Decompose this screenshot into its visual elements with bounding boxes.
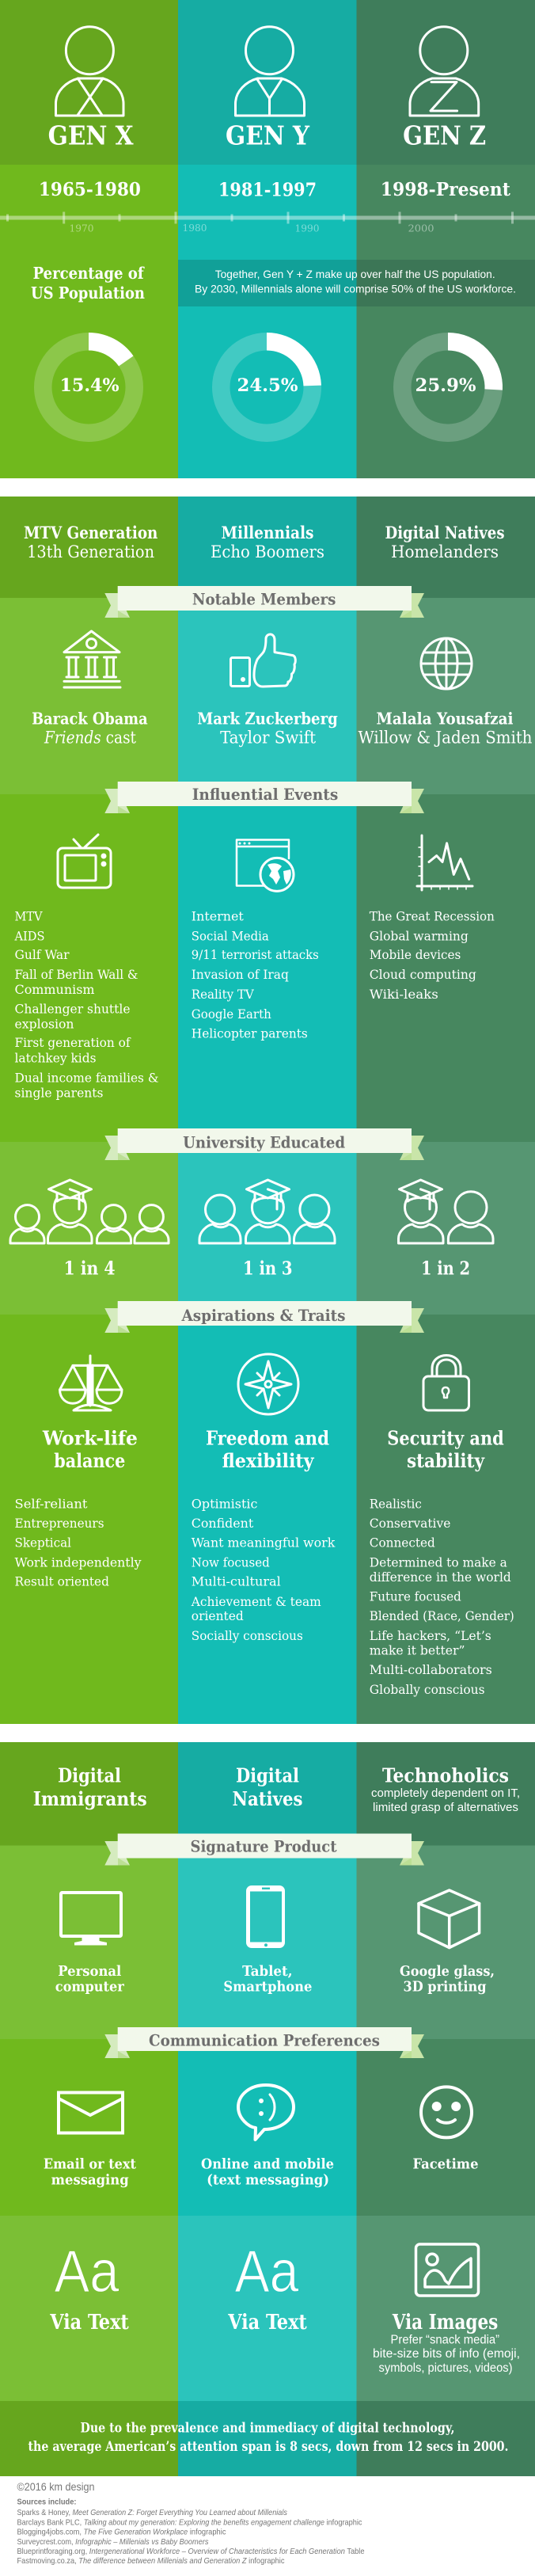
list: Gen Y influential events: Reality TV [192,987,255,1002]
icon: smiley face [421,2087,472,2137]
text: Google glass, 3D printing [400,1963,495,1996]
text: Facetime: Facetime [413,2156,478,2172]
icon: 1 in 3 graduates [199,1180,335,1243]
panel: generations overview [0,0,535,478]
list: Gen X influential events: Challenger shuttle [14,1003,130,1017]
icon: 3D cube [419,1890,480,1948]
list: Gen Y influential events: 9/11 terrorist attacks [192,948,319,962]
list: Gen Z traits: Future focused [370,1590,461,1604]
icon: globe [421,638,472,689]
text: Gen Y members [197,710,338,748]
text: Gen X members: Barack Obama [32,710,148,729]
callout: attention span [28,2421,508,2455]
list: Gen X influential events: single parents [14,1086,103,1101]
text: tablet, smartphone [223,1963,312,1996]
text: Gen Z aspiration: Security and [387,1426,504,1449]
text: Via Images, Gen Z: Via Images [392,2311,498,2334]
text: Technoholics: completely dependent on IT, [371,1786,520,1800]
list: Gen Y traits: Achievement & team [191,1595,321,1609]
heading: Gen Z: GEN Z [403,120,486,151]
icon: 1 in 4 graduates [10,1180,169,1243]
text: sources list: Blogging4jobs.com, The Five Generation Workplace infographic [17,2527,226,2536]
list: Gen Y influential events [192,909,319,1041]
text: Online and mobile: Online and mobile [201,2156,334,2172]
text: sources list: Barclays Bank PLC, Talking about my generation: Exploring the benefits engagement challenge infographic [17,2517,362,2527]
list: Gen Z influential events: Cloud computing [370,968,476,982]
text: percentage of US population [31,264,145,302]
list: Gen Y influential events: Helicopter parents [192,1026,308,1041]
text: sources list: Fastmoving.co.za, The difference between Millenials and Generation Z infographic [17,2556,285,2566]
list: Gen X traits: Skeptical [14,1536,72,1551]
text: Digital Natives: Natives [233,1787,302,1810]
list: Gen Z traits [370,1497,514,1697]
text: Gen Y aspiration [206,1426,329,1472]
icon: speech bubble smile [238,2085,294,2140]
icon: declining line chart [417,835,472,890]
text: Gen X nicknames [24,523,158,561]
icon: browser window with globe [237,839,294,891]
text: Email or text messaging: Email or text [44,2156,136,2172]
list: Gen Y traits: Now focused [192,1556,270,1570]
text: Gen X aspiration: balance [54,1449,125,1472]
list: Gen Y traits: Optimistic [192,1497,258,1512]
text: Gen X nicknames: 13th Generation [27,542,154,561]
list: Gen Z traits: Conservative [370,1516,450,1531]
chart: timeline: 1980 [182,223,207,234]
list: Gen X traits: Entrepreneurs [14,1516,104,1531]
icon: Gen X person [55,27,123,116]
list: Gen X influential events: explosion [14,1017,74,1031]
text: Via Images, Gen Z [373,2311,520,2375]
chart: Gen Y donut 24.5%: 24.5% [237,375,298,396]
list: Gen X influential events: Communism [14,983,94,997]
text: Gen X letter sample: Aa [54,2238,120,2304]
list: Gen X traits: Result oriented [14,1575,109,1589]
chart: Gen Z donut 25.9%: 25.9% [415,375,476,396]
list: Gen Z influential events: Wiki-leaks [370,987,438,1002]
list: Gen X traits [14,1497,142,1589]
list: Gen X influential events: AIDS [13,929,44,943]
heading: Gen X: GEN X [48,120,135,151]
heading ribbon: Communication Preferences [104,2027,424,2058]
callout: Gen Y and Z share: Together, Gen Y + Z make up over half the US population. [215,268,495,280]
list: Gen Z traits: Globally conscious [370,1683,484,1697]
text: Email or text messaging [44,2156,136,2189]
text: percentage of US population: US Population [31,283,145,302]
list: Gen Z traits: Blended (Race, Gender) [370,1609,514,1623]
list: Gen Z influential events [370,909,495,1002]
text: sources list [17,2498,365,2566]
panel: technology and communication [0,1742,535,2476]
text: Online and mobile: (text messaging) [207,2172,329,2189]
text: Digital Immigrants: Digital [58,1764,121,1787]
list: Gen X influential events: Gulf War [14,948,70,962]
text: Via Text, Gen Y: Via Text [227,2311,307,2334]
heading ribbon: Influential Events [104,782,424,813]
text: Digital Natives: Digital [236,1764,299,1787]
heading ribbon: Signature Product [104,1834,424,1866]
text: Via Images, Gen Z: Prefer “snack media” [391,2333,499,2346]
text: Gen Z years: 1998-Present [381,179,510,200]
text: Technoholics [371,1764,520,1814]
text: Gen Z members: Willow & Jaden Smith [358,729,532,748]
heading ribbon: Influential Events: Influential Events [192,785,338,804]
chart: Gen Y donut 24.5% [221,341,313,433]
text: Gen Y nicknames: Millennials [222,523,313,542]
heading ribbon: Notable Members: Notable Members [192,589,336,608]
callout: Gen Y and Z share: By 2030, Millennials alone will comprise 50% of the US workforce. [195,283,516,295]
text: Gen Z aspiration: stability [407,1449,485,1472]
text: sources list: Sparks & Honey, Meet Generation Z: Forget Everything You Learned about Millenials [17,2508,288,2517]
text: 1 in 4: 1 in 4 [63,1258,116,1280]
text: Gen Y aspiration: Freedom and [206,1426,329,1449]
list: Gen Y traits: Multi-cultural [192,1575,281,1589]
list: Gen Y traits [191,1497,336,1643]
list: Gen X influential events [13,909,158,1101]
heading ribbon: Communication Preferences: Communication Preferences [149,2030,380,2049]
text: sources list: Surveycrest.com, Infographic – Millenials vs Baby Boomers [17,2537,209,2547]
text: Gen Z members: Malala Yousafzai [377,710,513,729]
callout: attention span: the average American’s attention span is 8 secs, down from 12 secs in 2000. [28,2439,508,2455]
heading: Gen Y: GEN Y [226,120,310,151]
icon: desktop monitor [61,1893,121,1945]
list: Gen Z influential events: Global warming [370,929,469,943]
text: Digital Natives [233,1764,302,1810]
text: Gen X members [32,710,148,748]
text: Gen X years: 1965-1980 [39,179,141,200]
icon: 1 in 2 graduates [399,1180,493,1243]
heading ribbon: Aspirations and Traits: Aspirations & Traits [180,1306,345,1325]
heading ribbon: Notable Members [104,586,424,618]
icon: picture frame [416,2244,478,2296]
heading ribbon: University Educated: University Educated [183,1133,346,1152]
list: Gen Y traits: Socially conscious [192,1629,303,1643]
text: Gen Y years: 1981-1997 [218,179,317,201]
list: Gen Z traits: make it better” [370,1644,465,1658]
list: Gen Y traits: Want meaningful work [192,1536,336,1551]
text: Gen X aspiration: Work-life [42,1426,138,1449]
list: Gen Z influential events: Mobile devices [370,948,461,962]
text: Gen X aspiration [42,1426,138,1472]
text: Digital Immigrants: Immigrants [33,1787,147,1810]
text: Technoholics: Technoholics [382,1764,509,1787]
text: 1 in 3: 1 in 3 [243,1258,293,1280]
chart: timeline: 1990 [294,223,320,234]
text: personal computer: computer [55,1978,124,1996]
list: Gen X influential events: Dual income families & [14,1071,158,1085]
icon: smartphone [246,1885,285,1948]
list: Gen Z traits: Connected [370,1536,435,1551]
text: tablet, smartphone: Smartphone [223,1978,312,1996]
list: Gen X influential events: latchkey kids [14,1052,97,1066]
text: Gen Z nicknames: Homelanders [391,542,499,561]
chart: Gen X donut 15.4%: 15.4% [60,375,120,396]
list: Gen X traits: Self-reliant [14,1497,88,1512]
panel: profile and traits [0,497,535,1724]
icon: government building [64,631,120,687]
text: Digital Immigrants [33,1764,147,1810]
text: Gen Y members: Taylor Swift [220,729,317,748]
text: Via Text, Gen X: Via Text [49,2311,129,2334]
heading ribbon: University Educated [104,1128,424,1160]
text: Gen Z nicknames: Digital Natives [385,523,505,542]
chart: Gen Z donut 25.9% [402,341,494,433]
icon: scales of justice [60,1356,122,1410]
list: Gen X influential events: First generation of [14,1036,131,1050]
chart: timeline [0,212,535,234]
text: Email or text messaging: messaging [51,2172,129,2189]
icon: thumbs up and phone [231,634,295,687]
icon: Gen Y person [236,27,304,116]
text: Google glass, 3D printing: Google glass, [400,1963,495,1980]
icon: Gen Z person [410,27,479,116]
list: Gen Y influential events: Invasion of Iraq [192,968,289,982]
text: Gen Y nicknames [211,523,324,561]
text: Gen Z nicknames [385,523,505,561]
text: Online and mobile [201,2156,334,2189]
list: Gen Z traits: Life hackers, “Let’s [370,1629,491,1643]
heading ribbon: Aspirations and Traits [104,1301,424,1333]
icon: padlock [423,1356,469,1410]
text: Via Images, Gen Z: bite-size bits of info (emoji, [373,2347,520,2361]
list: Gen Z traits: Determined to make a [370,1556,507,1570]
icon: compass [238,1354,298,1414]
callout: Gen Y and Z share [178,260,535,306]
icon: envelope [59,2092,123,2133]
list: Gen Z traits: Multi-collaborators [370,1663,492,1677]
footer: credits and sources [17,2480,365,2566]
text: personal computer: Personal [58,1963,121,1980]
text: Gen Y nicknames: Echo Boomers [211,542,324,561]
list: Gen Y influential events: Internet [192,909,244,923]
list: Gen Y influential events: Google Earth [192,1007,271,1022]
text: Google glass, 3D printing: 3D printing [404,1978,486,1996]
list: Gen Y traits: oriented [192,1609,244,1623]
text: Gen X members: Friends cast [44,729,136,748]
text: personal computer [55,1963,124,1996]
chart: Gen X donut 15.4% [43,341,135,433]
list: Gen Z traits: Realistic [370,1497,422,1512]
text: sources list: Sources include: [17,2498,76,2507]
list: Gen Z influential events: The Great Recession [370,909,495,923]
text: sources list: Blueprintforaging.org, Intergenerational Workforce – Overview of Characteristics for Each Generation Table [17,2547,365,2556]
text: Gen Z members [358,710,532,748]
text: Gen Z aspiration [387,1426,504,1472]
list: Gen X influential events: MTV [14,909,43,923]
text: Gen Y aspiration: flexibility [222,1449,315,1472]
text: 1 in 2: 1 in 2 [421,1258,470,1280]
chart: timeline: 2000 [408,223,434,234]
text: Technoholics: limited grasp of alternatives [373,1801,518,1814]
text: Via Images, Gen Z: symbols, pictures, videos) [378,2361,513,2375]
text: tablet, smartphone: Tablet, [242,1963,292,1980]
list: Gen Y traits: Confident [192,1516,254,1531]
icon: television [58,835,111,888]
heading ribbon: Signature Product: Signature Product [190,1837,337,1856]
text: percentage of US population: Percentage of [33,264,145,283]
list: Gen Z traits: difference in the world [370,1570,511,1585]
chart: timeline: 1970 [70,223,94,234]
list: Gen Y influential events: Social Media [192,929,269,943]
list: Gen X traits: Work independently [14,1556,142,1570]
list: Gen X influential events: Fall of Berlin Wall & [14,968,138,982]
text: Gen Y members: Mark Zuckerberg [197,710,338,729]
callout: attention span: Due to the prevalence and immediacy of digital technology, [81,2421,454,2437]
text: Gen X nicknames: MTV Generation [24,523,158,542]
text: Gen Y letter sample: Aa [234,2238,299,2304]
text: copyright: ©2016 km design [17,2480,95,2493]
